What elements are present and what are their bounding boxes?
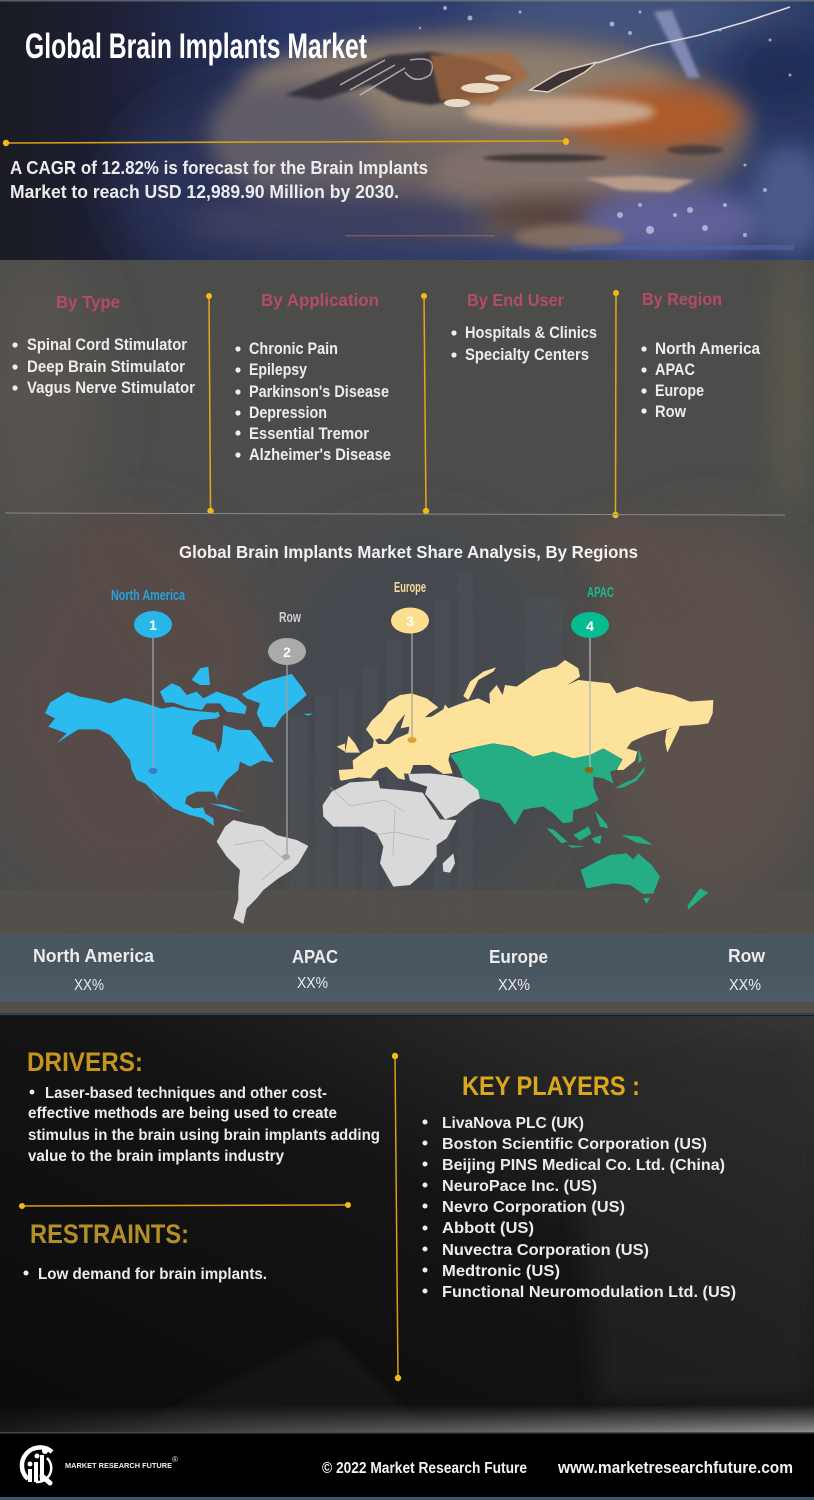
divider: application / end user: [421, 293, 429, 514]
website url: www.marketresearchfuture.com: [557, 1458, 793, 1477]
panel: key players: Abbott (US): [442, 1220, 534, 1237]
pin: apac: 4: [586, 618, 594, 634]
pin: north america: 1: [149, 617, 157, 633]
panel: key players: [422, 1071, 736, 1301]
panel: segment by region: By Region: [642, 289, 722, 309]
pin: north america: [111, 588, 186, 774]
panel: key players: Nuvectra Corporation (US): [442, 1242, 649, 1259]
pin: apac: [571, 585, 614, 773]
hero title: Global Brain Implants Market: [25, 27, 367, 66]
region: south america and africa: [217, 773, 480, 924]
panel: segment by region: North America: [655, 340, 761, 358]
region share: europe: [489, 947, 548, 994]
panel: key players: KEY PLAYERS :: [462, 1071, 640, 1101]
region: north america: [45, 667, 313, 826]
panel: key players: Nevro Corporation (US): [442, 1199, 625, 1216]
region share: europe: Europe: [489, 947, 548, 967]
panel: mid background: [0, 250, 814, 1015]
panel: segment by application: By Application: [261, 290, 379, 310]
panel: key players: Medtronic (US): [442, 1263, 560, 1280]
panel: hero banner: [0, 0, 814, 280]
panel: segment by application: [235, 290, 391, 464]
region share: north america: North America: [33, 946, 155, 966]
panel: segment by region: Row: [655, 403, 686, 421]
hero divider with end dots: [3, 138, 569, 146]
border lines: [235, 787, 430, 880]
hero forecast text: [10, 158, 428, 202]
panel: segment by application: Chronic Pain: [249, 340, 338, 358]
divider: left / key players: [392, 1053, 401, 1381]
panel: restraints: [24, 1219, 267, 1283]
head: forehead and face: [220, 35, 750, 235]
panel: footer: [0, 1432, 814, 1500]
panel: segment by region: [641, 289, 761, 421]
region share: apac: APAC: [292, 947, 338, 967]
panel: segment by type: [12, 292, 196, 397]
panel: drivers: value to the brain implants industry: [28, 1148, 284, 1165]
panel: segment by end user: By End User: [467, 290, 564, 310]
panel: key players: LivaNova PLC (UK): [442, 1115, 584, 1132]
hero forecast text: Market to reach USD 12,989.90 Million by 2030.: [10, 182, 399, 202]
panel: key players: Boston Scientific Corporation (US): [442, 1136, 707, 1153]
region share: north america: [33, 946, 155, 994]
panel: segment by region: Europe: [655, 382, 704, 400]
panel: segment by end user: [451, 290, 597, 364]
panel: segment by application: Parkinson's Disease: [249, 383, 389, 401]
pin: row: 2: [283, 644, 291, 660]
panel: restraints: Low demand for brain implants.: [38, 1266, 267, 1283]
pin: row: [268, 610, 306, 860]
panel: segment by application: Epilepsy: [249, 361, 308, 379]
region share: row: [728, 946, 766, 994]
panel: segment by type: Deep Brain Stimulator: [27, 358, 186, 376]
panel: restraints: RESTRAINTS:: [30, 1219, 189, 1249]
region share: apac: [292, 947, 338, 992]
starry speckles: [419, 6, 792, 237]
region share: apac: XX%: [297, 975, 328, 992]
panel: segment by application: Alzheimer's Disease: [249, 446, 391, 464]
panel: segment by type: By Type: [56, 292, 120, 312]
panel: segment by end user: Hospitals & Clinics: [465, 324, 597, 342]
divider: type / application: [206, 293, 214, 514]
panel: segment by application: Depression: [249, 404, 327, 422]
copyright: © 2022 Market Research Future: [322, 1460, 527, 1477]
panel: key players: Functional Neuromodulation Ltd. (US): [442, 1284, 736, 1301]
region share: europe: XX%: [498, 977, 530, 994]
world map: [45, 660, 713, 924]
panel: segment by end user: Specialty Centers: [465, 346, 589, 364]
region: europe and russia: [337, 660, 713, 781]
panel: drivers: stimulus in the brain using brain implants adding: [28, 1127, 380, 1144]
pin: europe: 3: [406, 613, 414, 629]
pin: apac: APAC: [587, 585, 614, 601]
icon: circuit implant: [285, 7, 790, 107]
region: asia pacific: [450, 743, 708, 909]
panel: footer: ®: [172, 1455, 178, 1464]
pin: north america: North America: [111, 588, 186, 604]
hero forecast text: A CAGR of 12.82% is forecast for the Brain Implants: [10, 158, 428, 178]
divider: drivers / restraints: [19, 1202, 351, 1209]
panel: segment by type: Spinal Cord Stimulator: [27, 336, 188, 354]
region share: row: XX%: [729, 977, 761, 994]
pin: europe: [391, 580, 429, 743]
panel: drivers: Laser-based techniques and other cost-: [45, 1085, 327, 1102]
panel: key players: NeuroPace Inc. (US): [442, 1178, 597, 1195]
divider: end user / region: [612, 290, 619, 518]
panel: lower dark background: [0, 1014, 814, 1434]
icon: market research future logo: [22, 1447, 52, 1483]
region share: row: Row: [728, 946, 766, 966]
panel: footer: MARKET RESEARCH FUTURE: [65, 1461, 172, 1470]
background bar chart motif: [290, 573, 562, 927]
pin: row: Row: [279, 610, 302, 626]
panel: drivers: effective methods are being used to create: [28, 1105, 337, 1122]
chart title: Global Brain Implants Market Share Analysis, By Regions: [179, 542, 638, 562]
panel: segment by type: Vagus Nerve Stimulator: [27, 379, 196, 397]
panel: drivers: DRIVERS:: [27, 1047, 143, 1077]
panel: key players: Beijing PINS Medical Co. Ltd. (China): [442, 1157, 725, 1174]
panel: segment by region: APAC: [655, 361, 695, 379]
panel: segment by application: Essential Tremor: [249, 425, 370, 443]
panel: drivers: [27, 1047, 380, 1165]
pin: europe: Europe: [394, 580, 426, 596]
panel: region share band: [0, 934, 814, 1002]
region share: north america: XX%: [74, 977, 104, 994]
